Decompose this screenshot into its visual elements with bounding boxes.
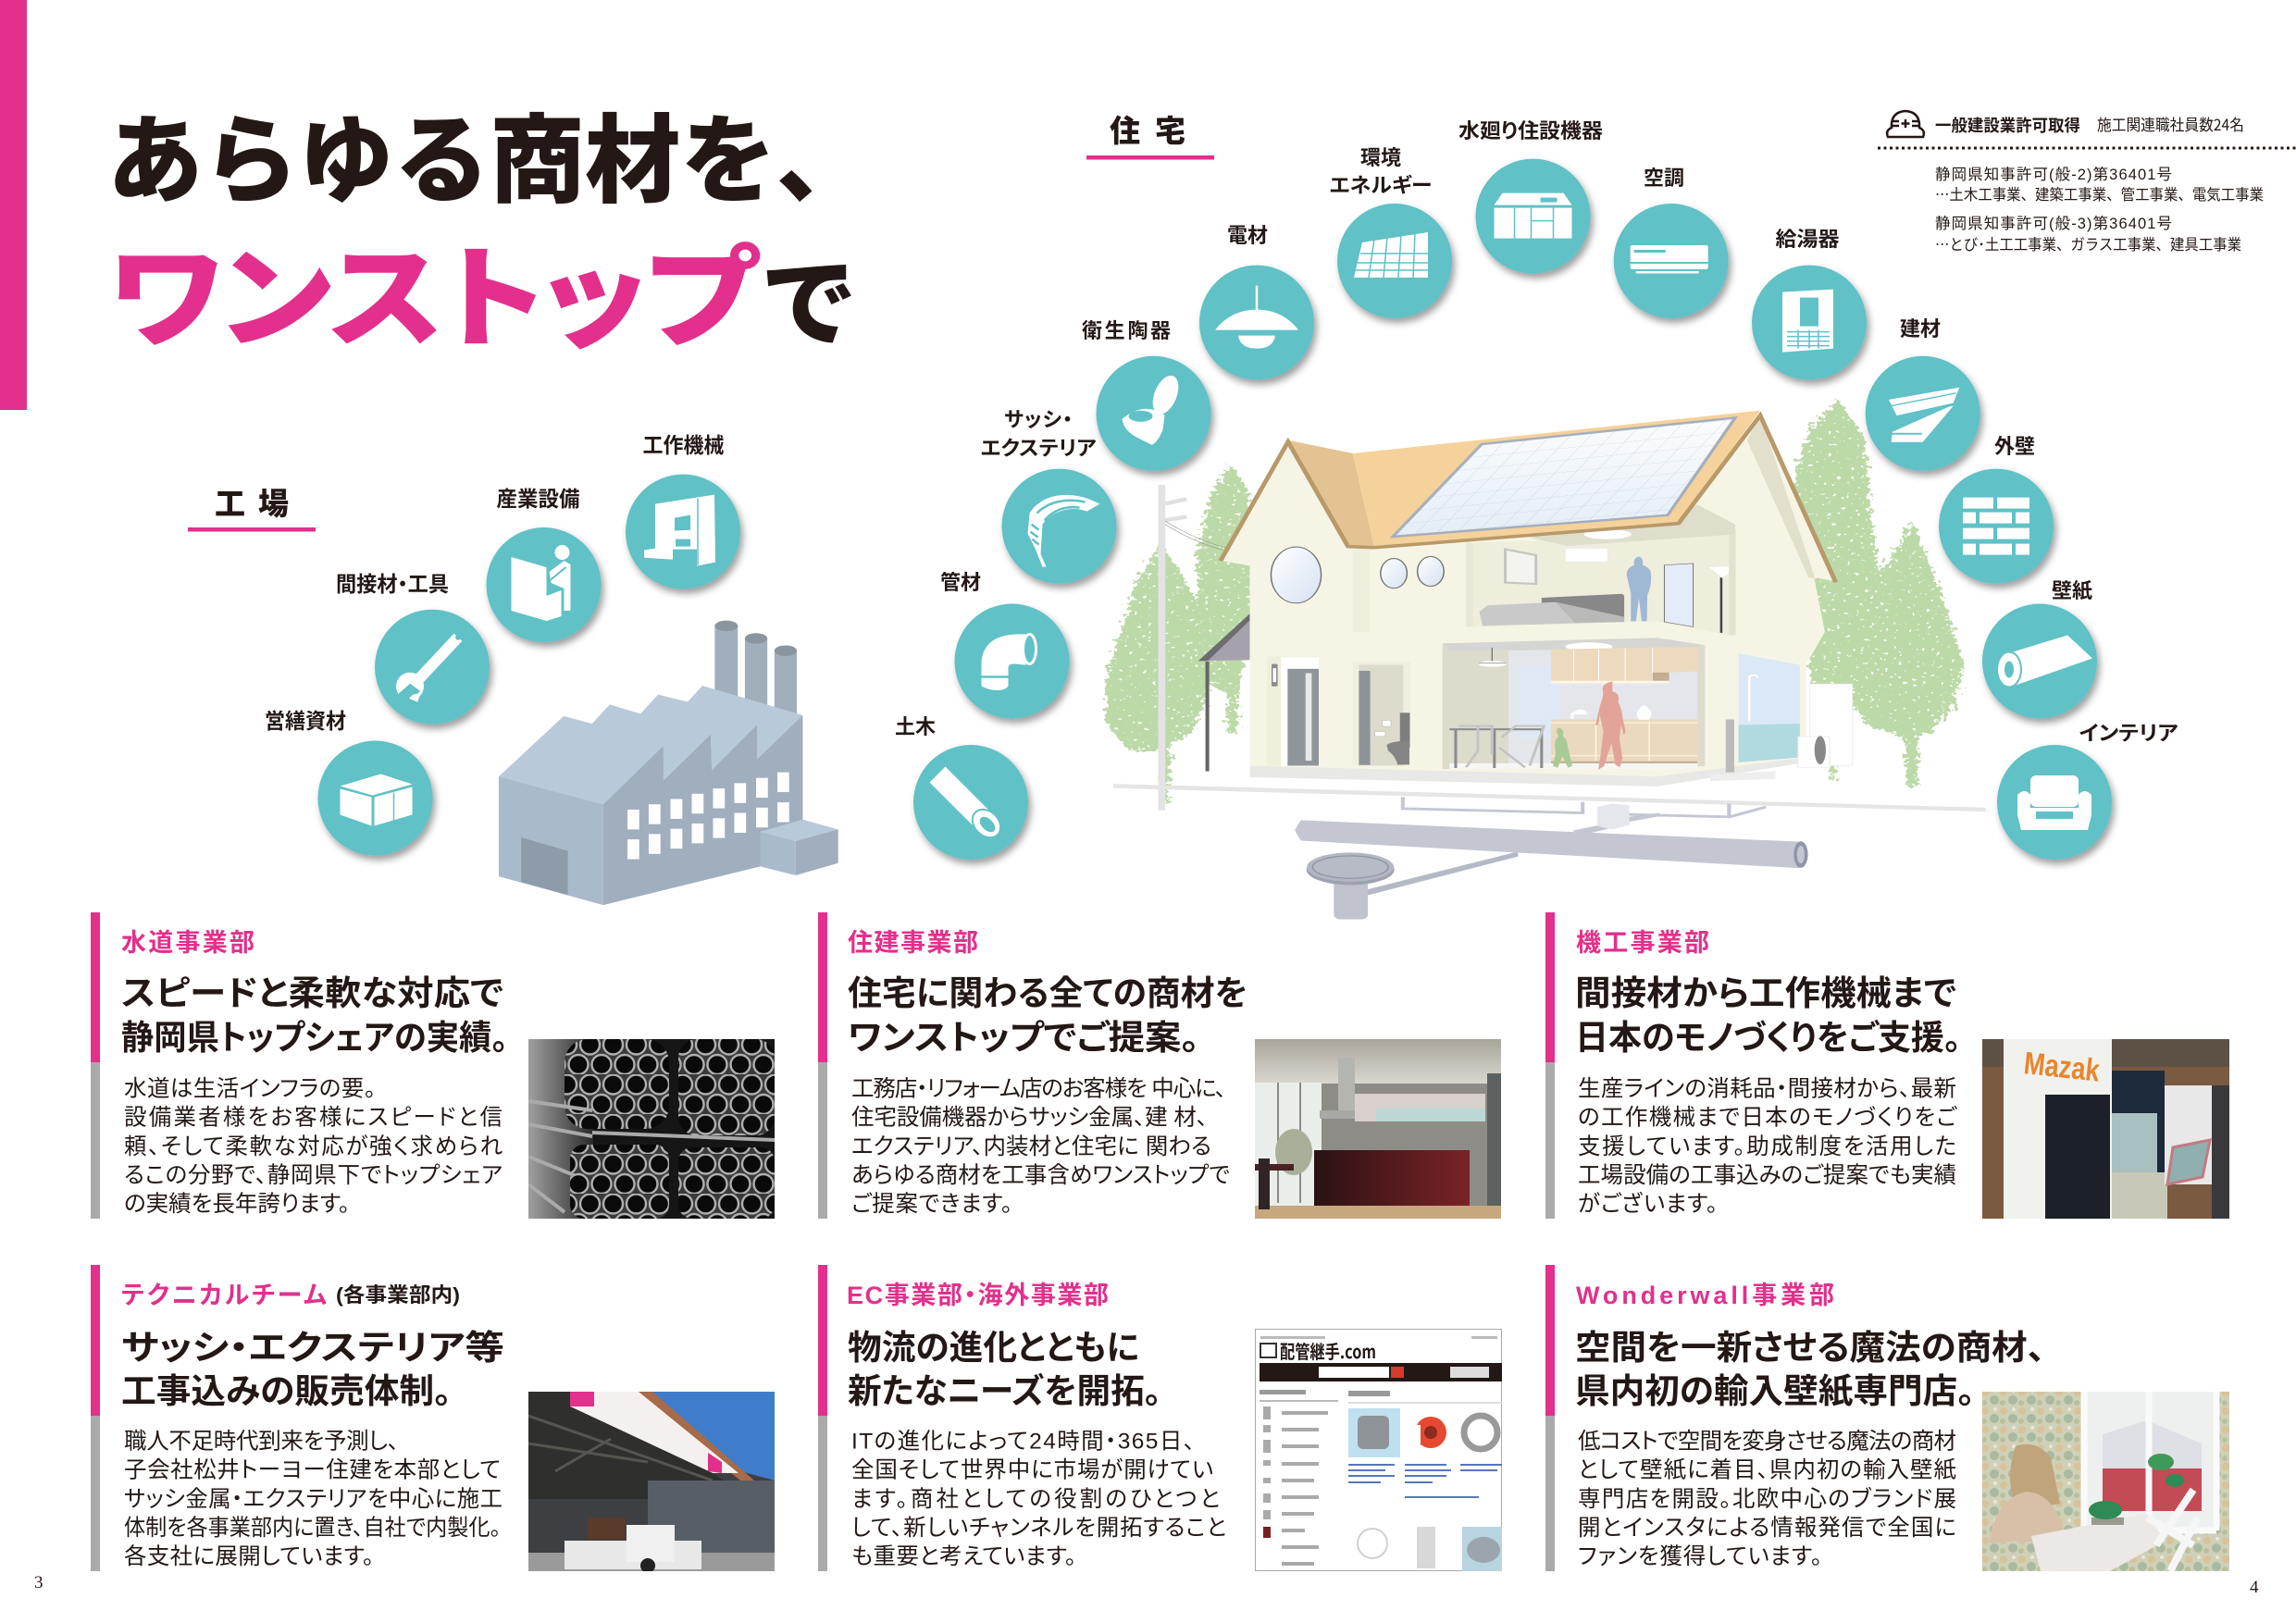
- icon: cabinet: [318, 740, 433, 855]
- housing heading: [1086, 106, 1214, 159]
- carport: [1198, 613, 1250, 772]
- housing heading: 住 宅: [1110, 106, 1185, 151]
- panel: technical team: 工事込みの販売体制。: [121, 1363, 452, 1413]
- icon: solar panel: [1337, 204, 1452, 318]
- panel: housing division: [818, 912, 1502, 1219]
- housing labels: 電材: [1227, 219, 1268, 249]
- factory labels: 産業設備: [496, 481, 579, 513]
- icon: sofa: [1997, 745, 2112, 860]
- panel: Wonderwall division: Wonderwall事業部: [1576, 1282, 1834, 1309]
- page number 3: 3: [34, 1573, 43, 1592]
- panel: Wonderwall division: 専門店を開設。北欧中心のブランド展: [1578, 1486, 1956, 1512]
- icon: toilet: [1096, 356, 1210, 471]
- panel: EC and overseas division: 新たなニーズを開拓。: [848, 1363, 1161, 1413]
- panel: technical team: (各事業部内): [336, 1283, 460, 1307]
- icon: bricks: [1939, 469, 2054, 584]
- housing labels: 建材: [1900, 313, 1941, 342]
- road line: [1113, 784, 1986, 812]
- photo: wallpapered room: [1982, 1392, 2229, 1571]
- panel: technical team: テクニカルチーム: [121, 1282, 327, 1309]
- panel: EC and overseas division: 全国そして世界中に市場が開けてい: [851, 1457, 1213, 1483]
- housing labels: 壁紙: [2052, 575, 2092, 604]
- housing labels: [895, 115, 2178, 747]
- factory labels: 間接材・工具: [336, 566, 449, 598]
- icon: helmet: [1887, 111, 1924, 137]
- panel: machinery division: 機工事業部: [1576, 929, 1709, 957]
- icon: kitchen: [1475, 159, 1590, 274]
- icon: sash carport: [1001, 469, 1116, 584]
- panel: housing division: 住宅設備機器からサッシ金属、建 材、: [851, 1105, 1208, 1131]
- housing labels: 環境: [1360, 142, 1401, 171]
- panel: EC and overseas division: ます。商社としての役割のひとつと: [851, 1486, 1220, 1512]
- title: で: [761, 226, 857, 365]
- panel: water division: るこの分野で、静岡県下でトップシェア: [124, 1162, 503, 1188]
- panel: Wonderwall division: 県内初の輸入壁紙専門店。: [1575, 1363, 1975, 1413]
- photo: kitchen: [1255, 1039, 1502, 1219]
- panel: EC and overseas division: して、新しいチャンネルを開拓すること: [851, 1515, 1226, 1541]
- panel: housing division: 工務店・リフォーム店のお客様を 中心に、: [851, 1075, 1226, 1101]
- icon: wrench: [375, 610, 490, 725]
- panel: technical team: 体制を各事業部内に置き、自社で内製化。: [124, 1515, 501, 1541]
- housing labels: 空調: [1644, 162, 1684, 192]
- license info block: 一般建設業許可取得: [1935, 113, 2080, 137]
- icon: timber: [1866, 356, 1980, 471]
- factory labels: 営繕資材: [265, 703, 346, 735]
- utility pole: [1159, 485, 1225, 811]
- panel: housing division: あらゆる商材を工事含めワンストップで: [851, 1162, 1230, 1188]
- panel: machinery division: 間接材から工作機械まで: [1575, 965, 1956, 1015]
- panel: EC and overseas division: も重要と考えています。: [851, 1543, 1076, 1569]
- icon: water heater: [1752, 266, 1867, 380]
- license info block: 施工関連職社員数24名: [2097, 112, 2244, 135]
- icon: pipe: [913, 745, 1028, 860]
- factory heading: 工 場: [215, 479, 289, 524]
- photo: warehouse and trucks: [528, 1392, 775, 1573]
- factory labels: [265, 427, 724, 735]
- icon: industrial equipment: [487, 527, 602, 642]
- panel: Wonderwall division: 空間を一新させる魔法の商材、: [1575, 1319, 2045, 1369]
- lower living room: [1443, 638, 1705, 770]
- panel: technical team: サッシ金属・エクステリアを中心に施工: [124, 1486, 503, 1512]
- panel: Wonderwall division: として壁紙に着目、県内初の輸入壁紙: [1578, 1457, 1956, 1483]
- roof: [1221, 411, 1836, 582]
- slab: [1250, 758, 1806, 787]
- house illustration: [1105, 399, 1986, 920]
- icon: machine tool: [626, 475, 740, 589]
- panel: water division: [91, 912, 775, 1219]
- photo: website screenshot: 配管継手.com: [1280, 1337, 1376, 1364]
- housing labels: 外壁: [1994, 430, 2035, 460]
- factory labels: 工作機械: [642, 427, 724, 459]
- entrance: [1267, 657, 1319, 765]
- license info block: [1878, 111, 2296, 254]
- trees: [1105, 399, 1964, 804]
- housing labels: 水廻り住設機器: [1458, 115, 1603, 144]
- panel: Wonderwall division: [1545, 1265, 2229, 1571]
- housing labels: サッシ・: [1004, 403, 1073, 433]
- license info block: 静岡県知事許可(般-3)第36401号: [1935, 215, 2172, 232]
- panel: housing division: 住建事業部: [848, 929, 978, 957]
- icon: air conditioner: [1614, 204, 1729, 318]
- title: [107, 82, 872, 370]
- housing labels: エネルギー: [1329, 169, 1433, 199]
- factory illustration: [499, 621, 838, 905]
- factory heading: [188, 479, 316, 531]
- housing labels: エクステリア: [981, 432, 1096, 462]
- panel: EC and overseas division: 物流の進化とともに: [848, 1319, 1139, 1369]
- outdoor units: [1710, 684, 1853, 781]
- solar panel: [1393, 417, 1735, 537]
- icon: elbow pipe: [955, 603, 1070, 718]
- housing labels: 給湯器: [1775, 223, 1840, 253]
- housing labels: インテリア: [2079, 717, 2178, 747]
- photo: machine tool: [1982, 1039, 2229, 1219]
- housing labels: 衛生陶器: [1082, 315, 1171, 344]
- photo: steel pipes: [528, 1039, 775, 1219]
- panel: technical team: 職人不足時代到来を予測し、: [124, 1429, 399, 1455]
- license info block: 静岡県知事許可(般-2)第36401号: [1935, 166, 2172, 183]
- panel: water division: 静岡県トップシェアの実績。: [121, 1010, 508, 1059]
- panel: water division: 水道は生活インフラの要。: [124, 1075, 376, 1101]
- license info block: …とび･土工工事業、ガラス工事業、建具工事業: [1935, 232, 2241, 254]
- panel: machinery division: [1545, 912, 2229, 1219]
- panel: water division: 水道事業部: [121, 929, 254, 957]
- icon: pendant lamp: [1199, 266, 1314, 380]
- panel: machinery division: 支援しています。助成制度を活用した: [1578, 1134, 1956, 1159]
- underground pipes: [1295, 797, 1808, 920]
- icon: wallpaper roll: [1982, 603, 2097, 718]
- house walls: [1221, 415, 1836, 777]
- panel: EC and overseas division: [818, 1265, 1502, 1571]
- panel: water division: スピードと柔軟な対応で: [121, 965, 503, 1015]
- panel: water division: の実績を長年誇ります。: [124, 1191, 350, 1217]
- panel: EC and overseas division: EC事業部・海外事業部: [847, 1282, 1109, 1309]
- panel: machinery division: 生産ラインの消耗品・間接材から、最新: [1578, 1075, 1956, 1101]
- housing labels: 土木: [895, 711, 936, 740]
- panel: housing division: ワンストップでご提案。: [848, 1010, 1199, 1059]
- panel: housing division: エクステリア、内装材と住宅に 関わる: [851, 1134, 1211, 1159]
- panel: technical team: 子会社松井トーヨー住建を本部として: [124, 1457, 501, 1483]
- title: ワンストップ: [109, 209, 761, 370]
- panel: EC and overseas division: ITの進化によって24時間・365日、: [851, 1429, 1195, 1455]
- windows: [1271, 547, 1444, 603]
- panel: technical team: サッシ・エクステリア等: [121, 1319, 504, 1369]
- panel: machinery division: がございます。: [1578, 1190, 1718, 1217]
- title: あらゆる商材を、: [107, 82, 872, 222]
- panel: machinery division: 工場設備の工事込みのご提案でも実績: [1578, 1162, 1956, 1188]
- panel: housing division: ご提案できます。: [851, 1191, 1012, 1217]
- panel: technical team: 各支社に展開しています。: [124, 1543, 374, 1569]
- bath: [1739, 653, 1800, 762]
- panel: machinery division: 日本のモノづくりをご支援。: [1575, 1010, 1961, 1059]
- panel: machinery division: の工作機械まで日本のモノづくりをご: [1578, 1105, 1957, 1131]
- upper room: [1353, 504, 1736, 635]
- panel: housing division: 住宅に関わる全ての商材を: [848, 965, 1247, 1015]
- photo: machine tool: Mazak: [2022, 1046, 2102, 1089]
- panel: technical team: [91, 1265, 775, 1573]
- photo: website screenshot: [1255, 1329, 1502, 1571]
- page number 4: 4: [2250, 1578, 2259, 1597]
- license info block: …土木工事業、建築工事業、管工事業、電気工事業: [1935, 182, 2264, 204]
- panel: water division: 設備業者様をお客様にスピードと信: [124, 1105, 503, 1131]
- housing labels: 管材: [940, 566, 981, 596]
- magenta corner bar: [0, 0, 27, 410]
- panel: Wonderwall division: 低コストで空間を変身させる魔法の商材: [1578, 1429, 1956, 1455]
- panel: water division: 頼、そして柔軟な対応が強く求められ: [124, 1134, 503, 1159]
- panel: Wonderwall division: ファンを獲得しています。: [1578, 1543, 1822, 1569]
- panel: Wonderwall division: 開とインスタによる情報発信で全国に: [1578, 1515, 1956, 1541]
- toilet room: [1353, 662, 1410, 765]
